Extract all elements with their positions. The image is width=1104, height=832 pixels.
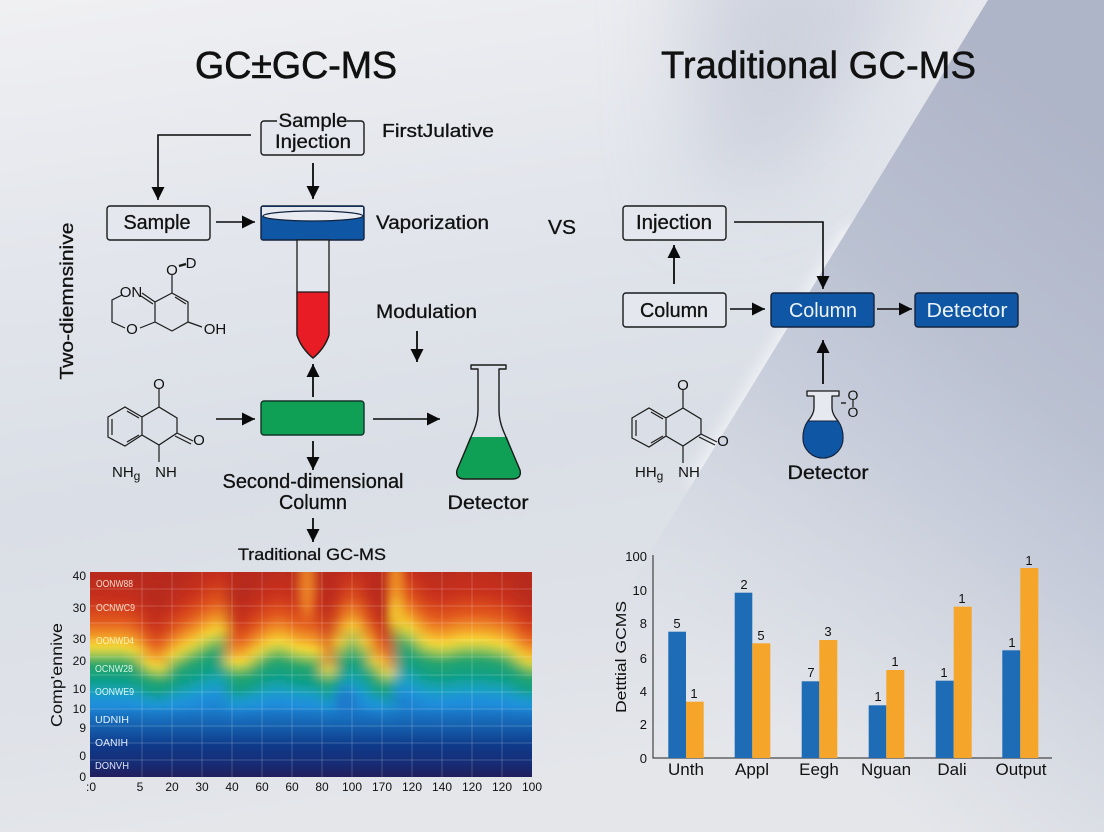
y tick labels: 6: [640, 651, 647, 666]
label: vaporization: Vaporization: [376, 213, 489, 234]
heatmap x axis: 100: [342, 780, 362, 794]
category labels: Dali: [937, 760, 967, 779]
axes: [653, 555, 1052, 758]
molecule: left naphthoquinone: NH: [155, 464, 177, 481]
box: column: [623, 293, 726, 327]
arrow: modulator to detector: [373, 418, 440, 420]
heatmap x axis: 100: [522, 780, 542, 794]
label: traditional GC-MS: Traditional GC-MS: [238, 545, 386, 564]
y tick labels: 10: [633, 583, 647, 598]
box: injection: [623, 206, 726, 240]
molecule: left naphthoquinone: g: [134, 469, 140, 483]
box: sample injection: Sample: [278, 110, 348, 132]
heatmap x axis: 40: [225, 780, 239, 794]
heatmap row labels: OONWD4: [96, 636, 134, 647]
heatmap y axis: 10: [73, 682, 86, 696]
chart: heatmap: [50, 572, 542, 791]
molecule: right naphthoquinone: [632, 377, 729, 483]
molecule: right naphthoquinone: g: [657, 469, 663, 483]
molecule: oxazine structure: O: [126, 321, 138, 338]
heatmap y axis: 40: [73, 569, 86, 583]
y tick labels: 8: [640, 616, 647, 631]
green modulator box: [261, 401, 364, 435]
heatmap x axis: 30: [195, 780, 209, 794]
icon: blue flask: O: [848, 404, 859, 420]
label: second-dimensional column: [222, 471, 404, 514]
title: Traditional GC-MS: Traditional GC-MS: [661, 45, 976, 87]
heatmap row labels: OONW88: [96, 579, 133, 590]
molecule: left naphthoquinone: NH: [112, 464, 134, 481]
arrow: modulator down: [312, 441, 314, 470]
category labels: Nguan: [861, 760, 911, 779]
molecule: left naphthoquinone: [108, 376, 205, 483]
heatmap row labels: [95, 579, 135, 772]
category labels: Appl: [735, 760, 769, 779]
heatmap x axis: 120: [402, 780, 422, 794]
heatmap x axis: 140: [432, 780, 452, 794]
arrow: modulation down: [416, 331, 418, 362]
label: second-dimensional column: Second-dimensional: [222, 471, 404, 493]
molecule: oxazine structure: ON: [120, 284, 142, 301]
molecule: right naphthoquinone: NH: [678, 464, 700, 481]
bar value labels: 5: [673, 616, 681, 631]
box: sample injection: Injection: [275, 131, 351, 153]
arrow: sample to vaporizer: [216, 221, 255, 223]
box: sample: [107, 206, 210, 240]
heatmap x axis: 60: [255, 780, 269, 794]
orange bars: [686, 568, 1038, 758]
bar value labels: 1: [1025, 553, 1033, 568]
label: second-dimensional column: Column: [279, 492, 347, 514]
heatmap field: [90, 572, 532, 777]
bar value labels: [673, 553, 1033, 704]
column tube: [297, 240, 329, 358]
heatmap x axis: 60: [285, 780, 299, 794]
y tick labels: [625, 549, 647, 766]
molecule: oxazine structure: [112, 255, 226, 338]
molecule: left naphthoquinone: O: [193, 432, 205, 449]
box: blue detector: Detector: [926, 300, 1008, 322]
label: modulation: Modulation: [376, 302, 477, 323]
panel: traditional GC-MS flow: [623, 206, 1018, 484]
bar value labels: 1: [874, 689, 882, 704]
arrow: injection to sample: [158, 135, 251, 200]
heatmap y axis: 0: [79, 770, 86, 784]
molecule: right naphthoquinone: O: [677, 377, 689, 394]
label: first: FirstJulative: [382, 121, 494, 141]
rotated label: two-dimensional: Two-diemnsinive: [57, 222, 77, 380]
heatmap x axis: :0: [86, 780, 96, 794]
heatmap y axis: [73, 569, 86, 784]
title: GC×GC-MS: GC±GC-MS: [195, 45, 397, 87]
box: sample injection: [261, 110, 364, 155]
heatmap row labels: OCNWC9: [96, 603, 135, 614]
heatmap y axis: 30: [73, 601, 86, 615]
label: detector: Detector: [448, 493, 529, 514]
heatmap x axis: 5: [137, 780, 144, 794]
category labels: Eegh: [799, 760, 839, 779]
heatmap x axis: 120: [462, 780, 482, 794]
VS label: VS: [548, 217, 576, 239]
molecule: oxazine structure: OH: [204, 321, 226, 338]
icon: blue flask: O: [848, 387, 859, 403]
heatmap y axis: 0: [79, 749, 86, 763]
arrow: injection to blue column: [734, 222, 823, 289]
heatmap row labels: OCNW28: [95, 664, 133, 675]
heatmap x axis: 120: [492, 780, 512, 794]
icon: green flask: [457, 365, 520, 479]
y tick labels: 2: [640, 717, 647, 732]
molecule: right naphthoquinone: O: [717, 433, 729, 450]
box: sample: Sample: [124, 212, 190, 234]
arrow: flask to blue column: [822, 340, 824, 384]
heatmap y label: Comp'ennive: [49, 623, 66, 727]
heatmap y axis: 10: [73, 702, 86, 716]
arrow: column up to injection: [673, 245, 675, 284]
arrow: molecule to modulator: [216, 418, 255, 420]
heatmap y axis: 20: [73, 654, 86, 668]
bar value labels: 1: [940, 665, 948, 680]
arrow: blue column to detector: [877, 308, 912, 310]
bar value labels: 3: [824, 624, 832, 639]
heatmap y axis: 9: [79, 721, 86, 735]
arrow: green box up to tube: [312, 364, 314, 397]
category labels: Output: [995, 760, 1047, 779]
box: blue detector: [915, 293, 1018, 327]
blue bars: [668, 593, 1020, 758]
bar value labels: 1: [891, 654, 899, 669]
category labels: Unth: [668, 760, 704, 779]
heatmap row labels: OANIH: [95, 738, 128, 749]
heatmap row labels: DONVH: [95, 761, 129, 772]
icon: blue flask: [803, 387, 859, 458]
molecule: oxazine structure: O: [166, 262, 178, 279]
box: injection: Injection: [636, 212, 712, 234]
molecule: right naphthoquinone: HH: [635, 464, 657, 481]
bar value labels: 2: [740, 577, 748, 592]
vaporizer chamber: [261, 206, 364, 240]
bar value labels: 5: [757, 628, 765, 643]
box: column: Column: [640, 300, 708, 322]
heatmap x axis: 170: [372, 780, 392, 794]
box: blue column: Column: [789, 300, 857, 322]
molecule: oxazine structure: D: [186, 255, 197, 272]
label: detector: Detector: [788, 463, 869, 484]
chart: bar chart: [613, 549, 1052, 779]
molecule: left naphthoquinone: O: [153, 376, 165, 393]
y tick labels: 4: [640, 684, 647, 699]
heatmap x axis: 80: [315, 780, 329, 794]
heatmap y axis: 30: [73, 632, 86, 646]
y tick labels: 0: [640, 751, 647, 766]
heatmap row labels: OONWE9: [95, 687, 134, 698]
bar value labels: 1: [1008, 635, 1016, 650]
y axis label: Detttial GCMS: [613, 601, 630, 713]
heatmap x axis: [86, 780, 542, 794]
bar value labels: 1: [958, 591, 966, 606]
arrow: injection to vaporizer: [312, 163, 314, 199]
bar value labels: 1: [690, 686, 698, 701]
heatmap x axis: 20: [165, 780, 179, 794]
panel: GC×GC-MS flow: [107, 110, 529, 564]
y tick labels: 100: [625, 549, 647, 564]
box: blue column: [771, 293, 874, 327]
arrow: column to blue column: [730, 308, 765, 310]
bar value labels: 7: [807, 665, 815, 680]
heatmap row labels: UDNIH: [95, 715, 129, 726]
arrow: column to traditional label: [312, 518, 314, 542]
category labels: [668, 760, 1047, 779]
